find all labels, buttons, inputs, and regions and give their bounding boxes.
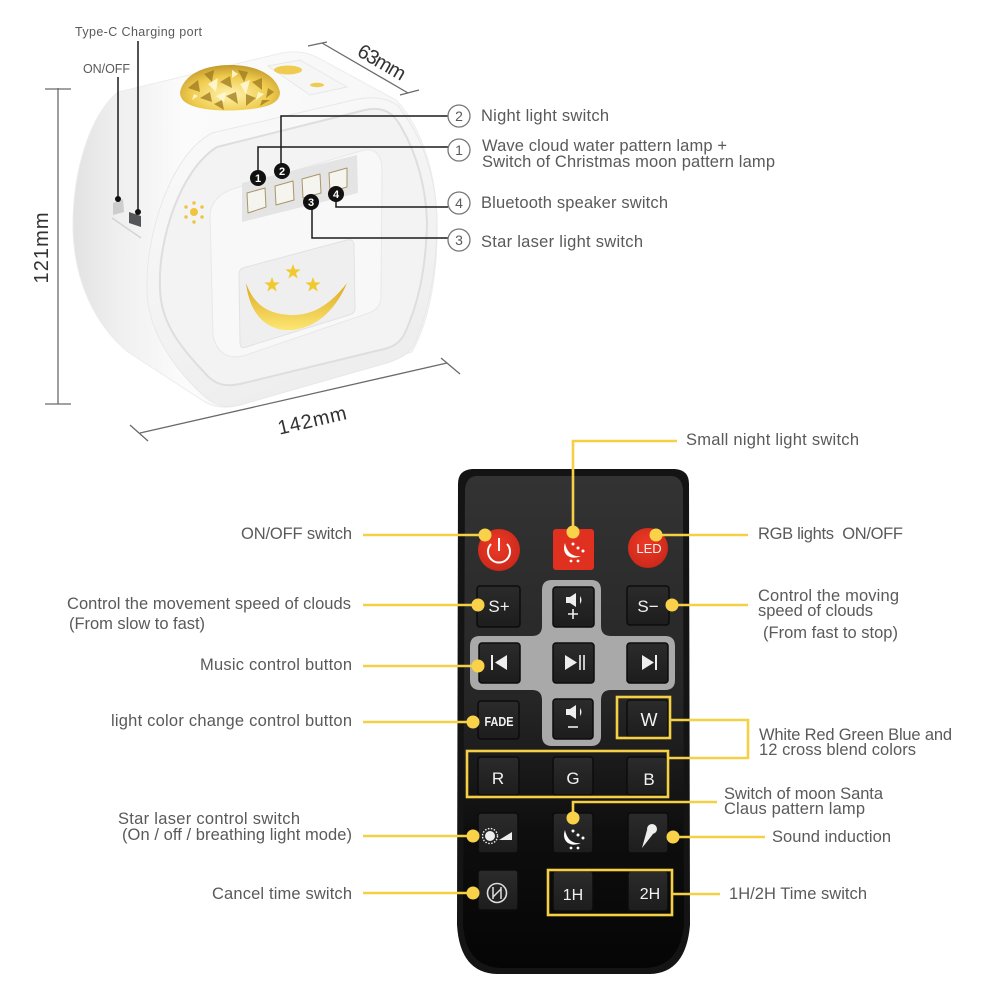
R button (478, 757, 519, 795)
button strip (242, 155, 358, 222)
power button (478, 529, 520, 571)
callout: cloud speed down: Control the moving (758, 587, 899, 605)
callout: music control: Music control button (200, 656, 352, 674)
star laser button (478, 813, 518, 853)
callout 2: night light switch: 2 (455, 108, 463, 124)
front face inner ring (160, 109, 427, 385)
FADE button: FADE (484, 714, 514, 729)
remote control (457, 469, 690, 974)
play pause button (553, 643, 594, 683)
2H button (628, 871, 668, 911)
callout: sound induction: Sound induction (772, 828, 891, 846)
G button: G (566, 769, 580, 788)
R button: R (492, 769, 504, 788)
S+ button: S+ (488, 597, 510, 616)
label: type-c port: Type-C Charging port (75, 25, 203, 39)
volume down button (553, 699, 593, 739)
front face rim (147, 98, 437, 407)
microphone button (628, 813, 668, 853)
projector device (73, 52, 437, 407)
callout: RGB lights: RGB lights ON/OFF (758, 525, 903, 543)
remote face (463, 476, 684, 968)
callout: moon santa pattern (566, 785, 884, 824)
callout: cloud speed down: speed of clouds (758, 602, 873, 620)
callout: cancel time: Cancel time switch (212, 885, 352, 903)
B button: B (643, 770, 655, 789)
crystal dome (180, 65, 280, 111)
top lamps (274, 66, 324, 87)
callout: on/off switch: ON/OFF switch (241, 525, 352, 543)
dimension: 142mm (130, 358, 460, 441)
callout: music control (200, 656, 484, 674)
callout 1: wave cloud switch: 1 (255, 173, 261, 185)
callout 2: night light switch (274, 105, 609, 179)
side ports (112, 199, 141, 238)
callout: on/off switch (241, 525, 492, 543)
S- button: S− (637, 597, 659, 616)
S- button (627, 586, 669, 625)
LED button: LED (636, 541, 662, 556)
callout: light color change: light color change control button (111, 712, 352, 730)
dimension: 121mm: 121mm (31, 212, 53, 284)
callout: time switch (548, 870, 867, 915)
callout 3: star laser light switch (303, 194, 643, 251)
label: on/off: ON/OFF (83, 62, 130, 76)
callout 3: star laser light switch: 3 (308, 197, 314, 209)
callout: color buttons: 12 cross blend colors (759, 741, 916, 759)
callout 2: night light switch: Night light switch (481, 107, 609, 125)
G button (553, 757, 593, 795)
callout: color buttons (467, 697, 952, 797)
B button (627, 757, 667, 795)
callout 1: wave cloud switch (250, 137, 775, 186)
S+ button (477, 586, 520, 627)
volume up button (553, 587, 594, 627)
callout: cancel time (212, 885, 480, 903)
callout 2: night light switch: 2 (279, 166, 285, 178)
callout: star laser control: (On / off / breathing light mode) (122, 826, 352, 844)
callout: star laser control: Star laser control switch (118, 810, 300, 828)
callout: small night light switch (566, 431, 859, 538)
1H button: 1H (563, 887, 583, 904)
label: type-c port (75, 25, 203, 215)
callout: small night light switch: Small night light switch (686, 431, 859, 449)
cancel timer button (478, 870, 518, 910)
callout 3: star laser light switch: Star laser light switch (481, 233, 643, 251)
callout: cloud speed up: Control the movement speed of clouds (67, 595, 351, 613)
callout: RGB lights (650, 525, 903, 543)
grey cross pad (470, 580, 675, 746)
device buttons (247, 168, 347, 213)
moon button (553, 529, 594, 570)
callout 1: wave cloud switch: 1 (455, 142, 463, 158)
callout 4: bluetooth speaker switch (328, 186, 668, 214)
callout 4: bluetooth speaker switch: 4 (455, 195, 463, 211)
2H button: 2H (640, 886, 660, 903)
dimension: 121mm (31, 88, 71, 404)
callout: sound induction (666, 828, 891, 846)
dimension: 63mm: 63mm (353, 40, 410, 85)
callout 4: bluetooth speaker switch: 4 (333, 189, 340, 201)
callout 3: star laser light switch: 3 (455, 232, 463, 248)
callout: cloud speed down: (From fast to stop) (763, 624, 898, 642)
callout: moon santa pattern: Switch of moon Santa (724, 785, 884, 803)
callout: light color change (111, 712, 480, 730)
device body (73, 52, 437, 407)
callout 1: wave cloud switch: Wave cloud water pattern lamp + (482, 137, 727, 155)
W button (627, 700, 668, 737)
dimension: 142mm: 142mm (276, 402, 349, 440)
1H button (553, 871, 593, 911)
next button (627, 643, 668, 683)
callout: star laser control (118, 810, 480, 844)
dimension: 63mm (308, 40, 419, 95)
callout: time switch: 1H/2H Time switch (729, 885, 867, 903)
top detail panel (268, 60, 347, 95)
label: on/off (83, 62, 130, 202)
callout: cloud speed up: (From slow to fast) (69, 615, 205, 633)
callout: color buttons: White Red Green Blue and (759, 726, 952, 744)
control panel (210, 150, 382, 357)
FADE button (478, 701, 519, 739)
callout: cloud speed up (67, 595, 484, 633)
callout 1: wave cloud switch: Switch of Christmas moon pattern lamp (482, 153, 775, 171)
callout 4: bluetooth speaker switch: Bluetooth speaker switch (481, 194, 668, 212)
moon and stars logo (246, 264, 347, 330)
moon panel (239, 240, 355, 348)
callout: moon santa pattern: Claus pattern lamp (724, 800, 865, 818)
W button: W (640, 710, 658, 730)
moon pattern button (553, 813, 593, 853)
remote body (457, 469, 690, 974)
callout: cloud speed down (666, 587, 899, 642)
LED button (628, 528, 668, 568)
previous button (479, 643, 520, 683)
sun indicator (184, 201, 204, 224)
